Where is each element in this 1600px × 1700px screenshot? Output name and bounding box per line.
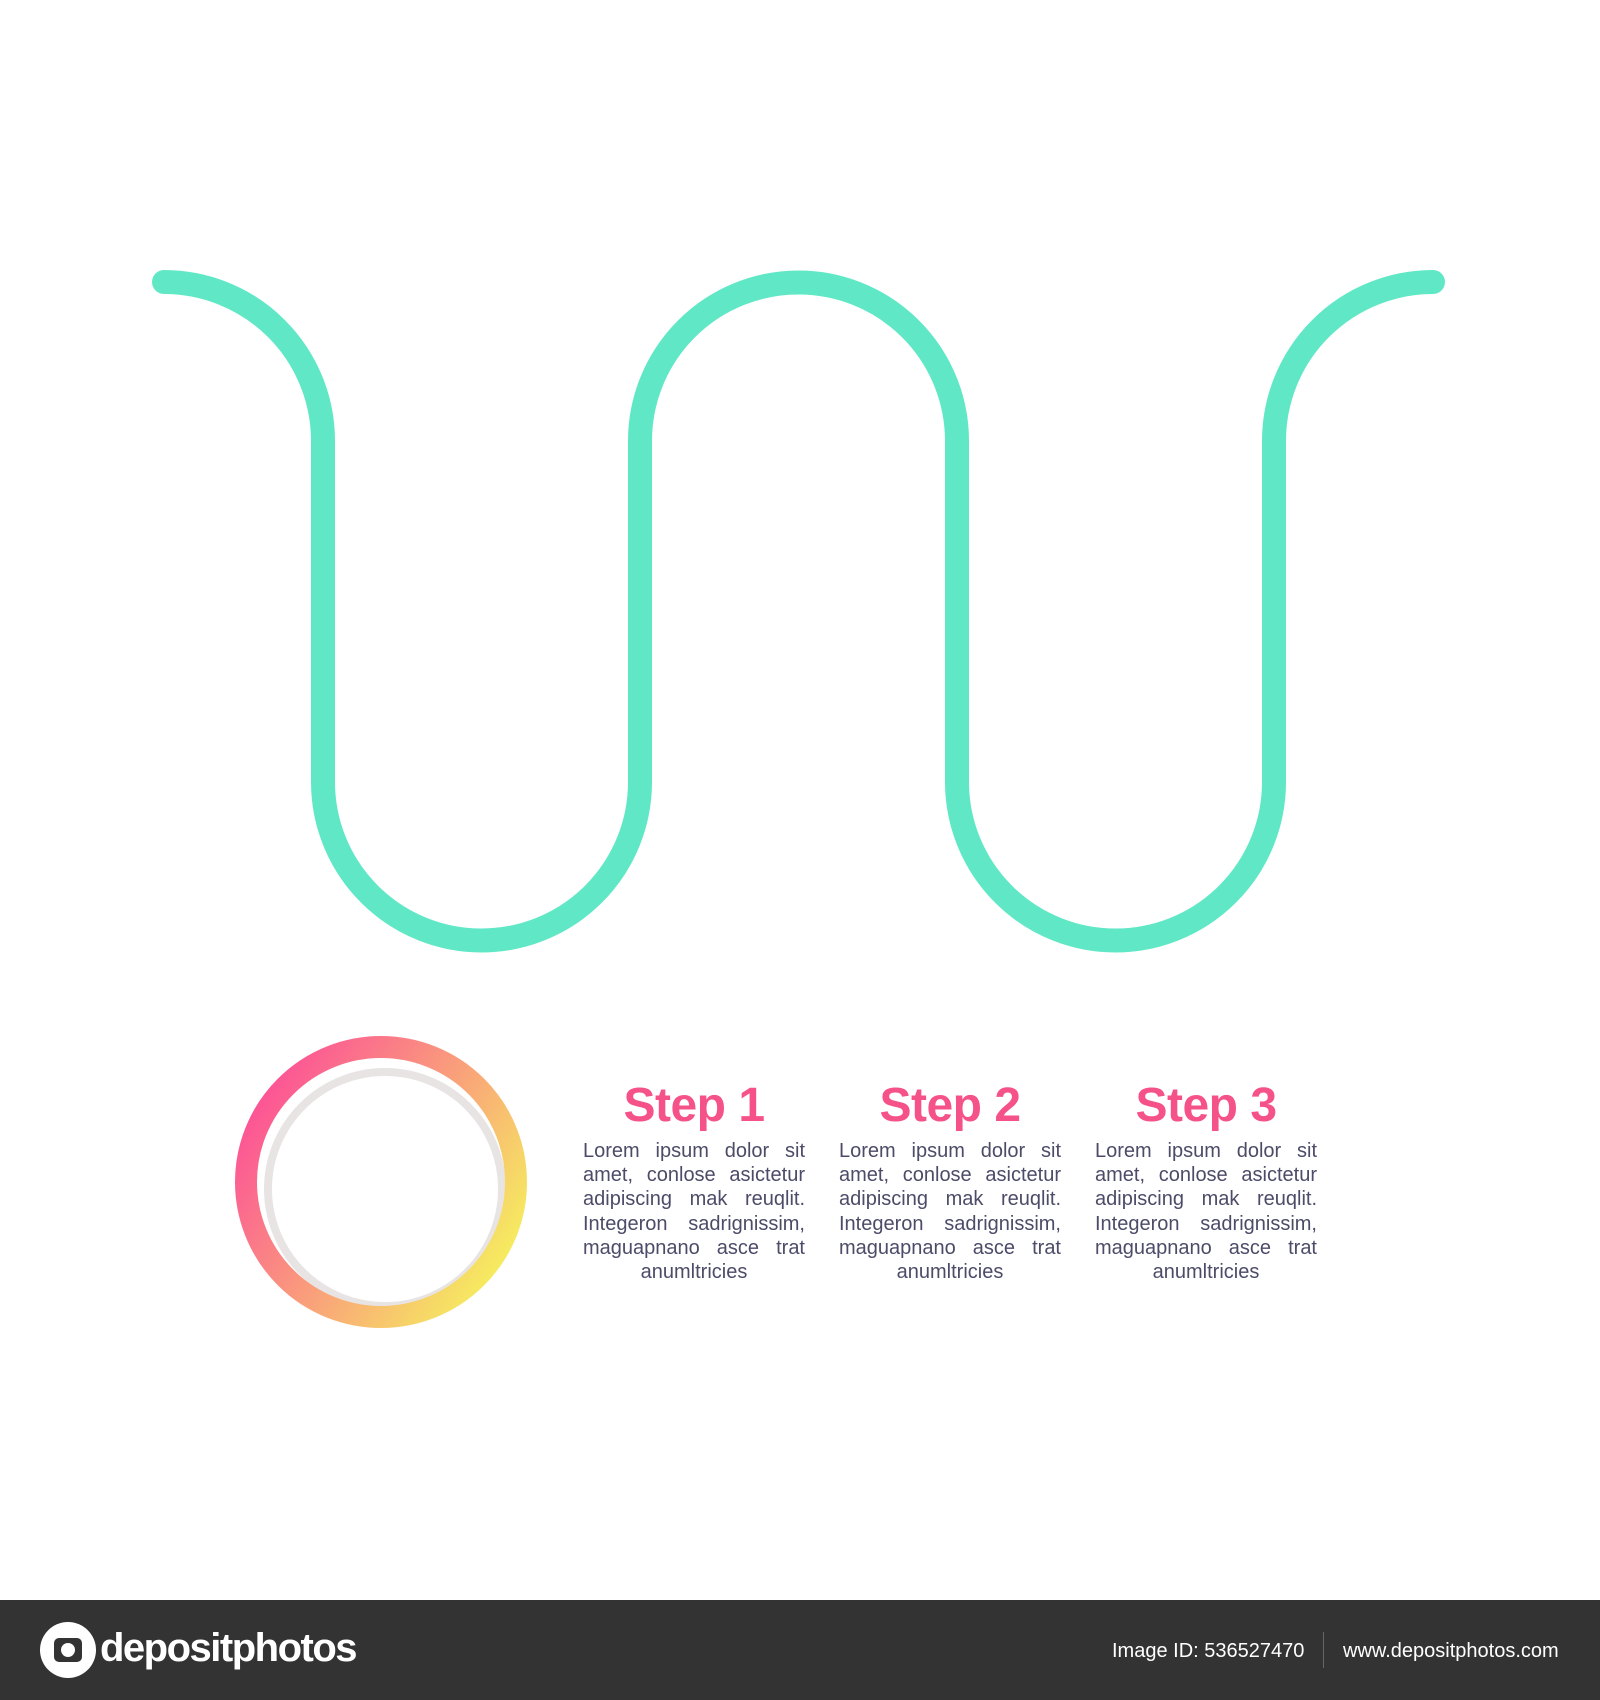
step 2: Lorem ipsum dolor sit amet, conlose asictetur adipiscing mak reuqlit. Integeron sadrignissim, maguapnano asce trat anumltricies [839, 1140, 1061, 1283]
image id: Image ID: 536527470 [1112, 1640, 1304, 1662]
logo [40, 1622, 356, 1678]
step 3: Step 3 [1135, 1079, 1277, 1132]
step 1: Lorem ipsum dolor sit amet, conlose asictetur adipiscing mak reuqlit. Integeron sadrignissim, maguapnano asce trat anumltricies [583, 1140, 805, 1283]
logo: depositphotos [100, 1626, 356, 1670]
url: www.depositphotos.com [1343, 1640, 1559, 1662]
footer [0, 1600, 1600, 1700]
step 2: Step 2 [879, 1079, 1021, 1132]
step 3: Lorem ipsum dolor sit amet, conlose asictetur adipiscing mak reuqlit. Integeron sadrignissim, maguapnano asce trat anumltricies [1095, 1140, 1317, 1283]
step 1: Step 1 [623, 1079, 765, 1132]
